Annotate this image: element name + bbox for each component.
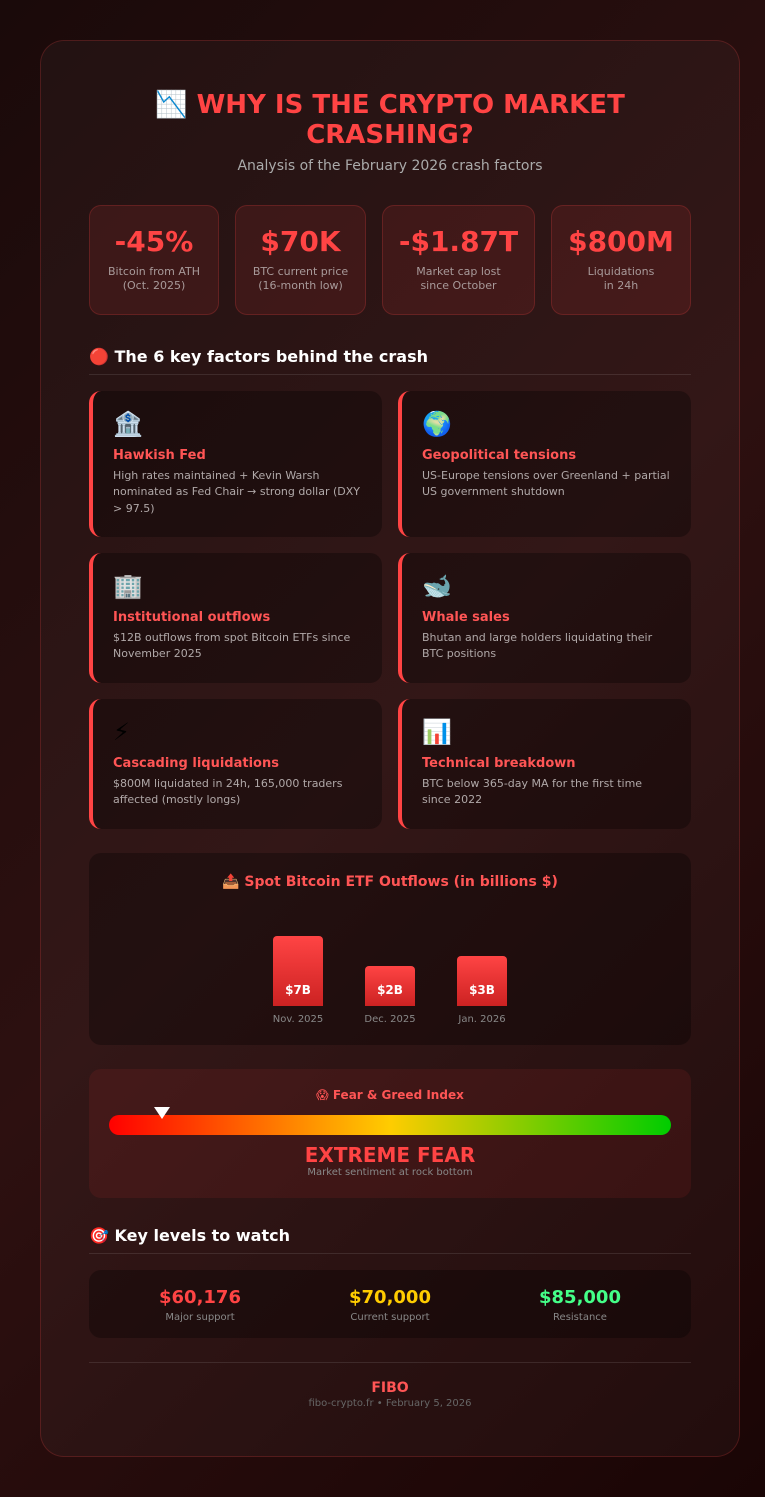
gauge marker <box>154 1107 170 1119</box>
stat: BTC price: $70K <box>260 225 341 258</box>
stat: BTC price: BTC current price <box>253 265 348 278</box>
factor: institutional outflows: Institutional outflows <box>113 610 270 625</box>
stat: BTC price: (16-month low) <box>258 279 343 292</box>
panel: key levels <box>89 1270 691 1338</box>
factor: institutional outflows <box>89 553 382 683</box>
factor: technical breakdown: Technical breakdown <box>422 756 576 771</box>
factor: technical breakdown: 📊 <box>422 718 452 746</box>
stat: BTC price <box>235 205 366 315</box>
bar chart <box>273 936 507 1025</box>
level: resistance: Resistance <box>553 1312 607 1323</box>
bar: Nov 2025 <box>273 936 323 1006</box>
footer source: fibo-crypto.fr • February 5, 2026 <box>308 1398 472 1409</box>
heading: key factors <box>89 345 691 375</box>
factor: cascading liquidations: $800M liquidated in 24h, 165,000 traders affected (mostly longs) <box>113 777 342 806</box>
factor: geopolitical tensions: 🌍 <box>422 410 452 438</box>
stat: bitcoin from ATH: (Oct. 2025) <box>123 279 185 292</box>
level: current support: Current support <box>350 1312 430 1323</box>
level: current support: $70,000 <box>349 1287 431 1308</box>
stat: bitcoin from ATH <box>89 205 219 315</box>
bar: Dec 2025: $2B <box>377 983 403 997</box>
factor: geopolitical tensions: US-Europe tensions over Greenland + partial US government shutdown <box>422 469 670 498</box>
gauge value: EXTREME FEAR <box>305 1143 475 1167</box>
factor: cascading liquidations: Cascading liquidations <box>113 756 279 771</box>
stat: market cap lost: Market cap lost <box>416 265 501 278</box>
subtitle: Analysis of the February 2026 crash factors <box>237 158 543 174</box>
factor: hawkish fed <box>89 391 382 537</box>
chart title: 📤 Spot Bitcoin ETF Outflows (in billions $) <box>222 874 558 890</box>
factor: institutional outflows: 🏢 <box>113 572 143 600</box>
level: resistance: $85,000 <box>539 1287 621 1308</box>
panel: ETF outflows chart <box>89 853 691 1045</box>
gauge bar <box>109 1115 671 1135</box>
bar label: Dec. 2025 <box>364 1014 416 1025</box>
factor: whale sales <box>398 553 691 683</box>
footer <box>89 1362 691 1412</box>
factor: technical breakdown: BTC below 365-day MA for the first time since 2022 <box>422 777 642 806</box>
heading: key levels: 🎯 Key levels to watch <box>89 1226 290 1245</box>
level: current support <box>349 1287 431 1323</box>
bar: Dec 2025 <box>365 966 415 1006</box>
level: major support: Major support <box>165 1312 235 1323</box>
heading: key factors: 🔴 The 6 key factors behind the crash <box>89 347 428 366</box>
factor: whale sales: Bhutan and large holders liquidating their BTC positions <box>422 631 652 660</box>
factor: geopolitical tensions: Geopolitical tensions <box>422 448 576 463</box>
factor: hawkish fed: Hawkish Fed <box>113 448 206 463</box>
stat: bitcoin from ATH: -45% <box>115 225 193 258</box>
level: resistance <box>539 1287 621 1323</box>
stat: market cap lost <box>382 205 535 315</box>
factor: hawkish fed: 🏦 <box>113 410 143 438</box>
factor: hawkish fed: High rates maintained + Kevin Warsh nominated as Fed Chair → strong dollar (DXY > 97.5) <box>113 469 360 515</box>
bar: Nov 2025: $7B <box>285 983 311 997</box>
fear and greed title: 😱 Fear & Greed Index <box>316 1088 464 1102</box>
stat: liquidations: in 24h <box>604 279 638 292</box>
bar: Jan 2026 <box>457 956 507 1006</box>
factor: geopolitical tensions <box>398 391 691 537</box>
factor: whale sales: Whale sales <box>422 610 510 625</box>
stat: market cap lost: since October <box>420 279 497 292</box>
bar label: Jan. 2026 <box>458 1014 506 1025</box>
stat: market cap lost: -$1.87T <box>399 225 518 258</box>
factor: whale sales: 🐋 <box>422 572 452 600</box>
bar label: Nov. 2025 <box>273 1014 323 1025</box>
stat: liquidations: $800M <box>568 225 674 258</box>
factor: technical breakdown <box>398 699 691 829</box>
panel: fear and greed <box>89 1069 691 1198</box>
stat: liquidations: Liquidations <box>588 265 654 278</box>
stat: liquidations <box>551 205 691 315</box>
footer brand: FIBO <box>371 1380 409 1396</box>
level: major support <box>159 1287 241 1323</box>
heading: key levels <box>89 1224 691 1254</box>
title: 📉 WHY IS THE CRYPTO MARKET CRASHING? <box>155 90 625 150</box>
bar: Jan 2026: $3B <box>469 983 495 997</box>
factor: institutional outflows: $12B outflows from spot Bitcoin ETFs since November 2025 <box>113 631 350 660</box>
stat: bitcoin from ATH: Bitcoin from ATH <box>108 265 200 278</box>
level: major support: $60,176 <box>159 1287 241 1308</box>
gauge caption: Market sentiment at rock bottom <box>307 1167 473 1178</box>
factor: cascading liquidations: ⚡ <box>113 718 130 746</box>
factor: cascading liquidations <box>89 699 382 829</box>
